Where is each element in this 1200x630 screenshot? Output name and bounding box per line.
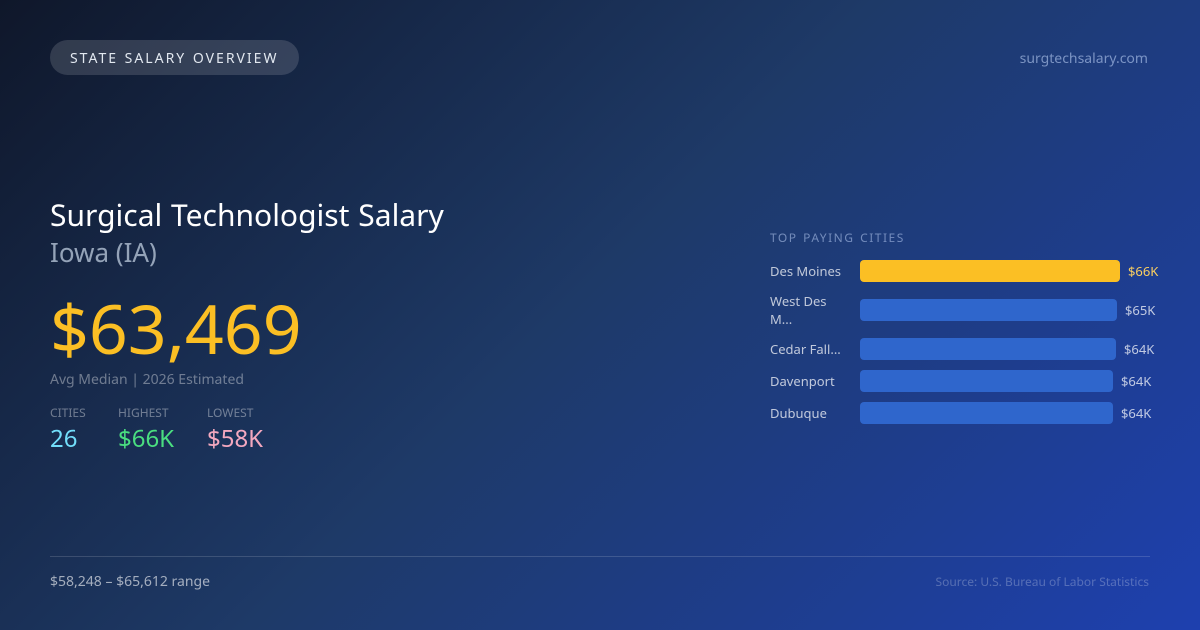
- stat: highest: HIGHEST: [118, 404, 169, 421]
- bar row: Cedar Falls: $64K: [1124, 340, 1154, 358]
- bar row: West Des Moines: M...: [770, 310, 792, 328]
- panel: salary summary: [50, 194, 444, 455]
- bar row: Des Moines: Des Moines: [770, 262, 841, 280]
- bar row: Cedar Falls: Cedar Fall...: [770, 340, 841, 358]
- stat: lowest: $58K: [207, 422, 263, 455]
- badge: state salary overview: [50, 40, 299, 75]
- site name: surgtechsalary.com: [1020, 49, 1148, 68]
- stat: cities: 26: [50, 422, 77, 455]
- bar row: West Des Moines: [770, 292, 1156, 328]
- footer: source: Source: U.S. Bureau of Labor Statistics: [936, 573, 1149, 590]
- bar row: Des Moines: [770, 260, 1158, 282]
- title: Surgical Technologist Salary: [50, 194, 444, 235]
- salary caption: Avg Median | 2026 Estimated: [50, 370, 244, 389]
- stat: highest: [118, 404, 174, 455]
- bar row: Dubuque: Dubuque: [770, 404, 827, 422]
- bar row: Davenport: Davenport: [770, 372, 835, 390]
- average median salary: $63,469: [50, 281, 302, 374]
- bar row: Des Moines: $66K: [1128, 262, 1158, 280]
- chart heading: top paying cities: TOP PAYING CITIES: [770, 229, 905, 246]
- bar row: Cedar Falls: [770, 338, 1154, 360]
- bar row: West Des Moines: West Des: [770, 292, 827, 310]
- stat: lowest: LOWEST: [207, 404, 253, 421]
- bar row: Davenport: $64K: [1121, 372, 1151, 390]
- stat: cities: [50, 404, 86, 455]
- stat: cities: CITIES: [50, 404, 86, 421]
- badge: state salary overview: STATE SALARY OVERVIEW: [70, 49, 278, 68]
- stat: highest: $66K: [118, 422, 174, 455]
- stat: lowest: [207, 404, 263, 455]
- bar row: West Des Moines: $65K: [1125, 301, 1155, 319]
- subtitle: state: Iowa (IA): [50, 234, 157, 270]
- bar row: Dubuque: [770, 402, 1152, 424]
- footer divider: [50, 556, 1150, 557]
- bar row: Davenport: [770, 370, 1152, 392]
- footer: salary range: $58,248 – $65,612 range: [50, 572, 210, 591]
- bar row: Dubuque: $64K: [1121, 404, 1151, 422]
